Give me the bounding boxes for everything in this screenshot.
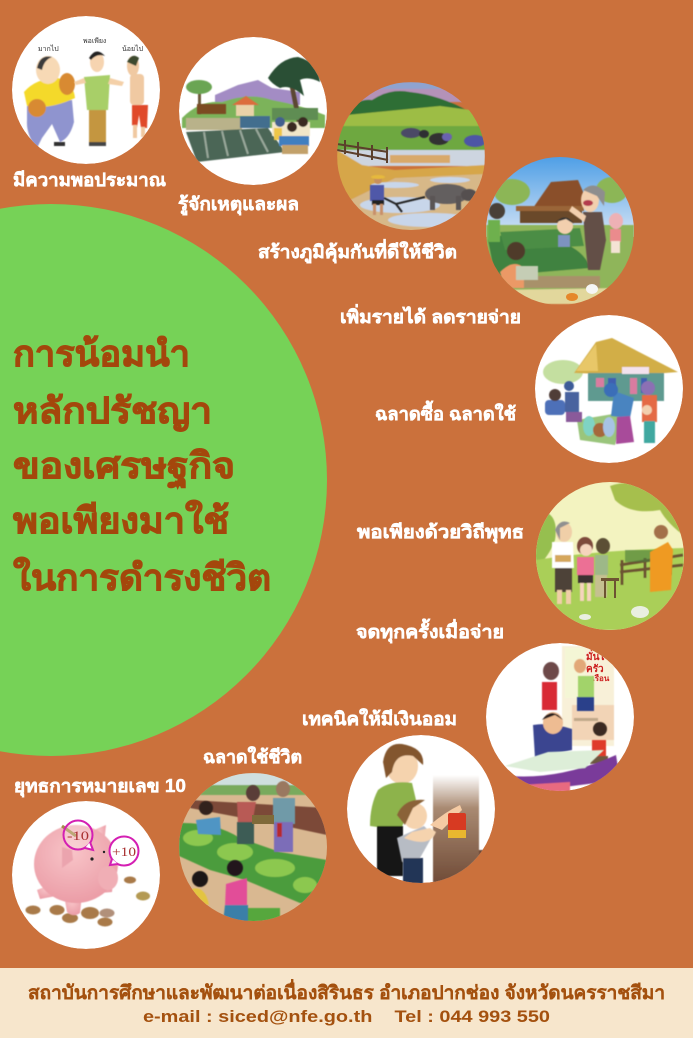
panel: account keeping illustration bbox=[486, 643, 634, 795]
buffalo bbox=[425, 184, 477, 210]
coin slot stick bbox=[62, 826, 76, 836]
child bbox=[590, 722, 608, 764]
panel: garden and house illustration bbox=[486, 157, 634, 304]
coins bbox=[26, 876, 150, 926]
labels in illustration: น้อยไป bbox=[122, 44, 144, 53]
bubble plus ten: +10 bbox=[112, 844, 136, 859]
title: ของเศรษฐกิจ bbox=[13, 445, 235, 489]
customers bbox=[545, 381, 657, 444]
elder bbox=[552, 522, 574, 604]
woman bbox=[237, 785, 260, 844]
jars bbox=[583, 416, 615, 437]
father bbox=[370, 744, 423, 876]
bubble plus ten bbox=[110, 836, 138, 866]
label: immunity: สร้างภูมิคุ้มกันที่ดีให้ชีวิต bbox=[258, 239, 457, 264]
boy bbox=[397, 800, 436, 886]
pig character bbox=[609, 213, 623, 253]
bubble minus ten: -10 bbox=[67, 828, 89, 843]
figure: middle man bbox=[74, 51, 124, 146]
house and sign bbox=[197, 96, 259, 116]
title: พอเพียงมาใช้ bbox=[13, 499, 229, 541]
child in yellow bbox=[192, 871, 209, 905]
child left bbox=[488, 203, 505, 242]
panel: almsgiving illustration bbox=[535, 482, 690, 630]
child in center bbox=[556, 217, 574, 247]
panel: shop illustration bbox=[535, 315, 683, 463]
footer institute name: สถาบันการศึกษาและพัฒนาต่อเนื่องสิรินธร อำเภอปากช่อง จังหวัดนครราชสีมา bbox=[28, 979, 665, 1004]
crouching boy bbox=[196, 801, 221, 835]
trees, house and garden bbox=[486, 177, 634, 304]
arm reaching to can bbox=[430, 805, 462, 830]
child back bbox=[500, 242, 538, 288]
household chart title bbox=[586, 649, 610, 683]
panel: vegetable garden illustration bbox=[179, 773, 327, 924]
girl in pink bbox=[577, 537, 594, 601]
father at table bbox=[533, 712, 572, 758]
man on stool bbox=[574, 659, 598, 721]
woman in red bbox=[542, 662, 559, 710]
fence bbox=[337, 140, 388, 163]
shop bbox=[543, 338, 678, 445]
label: smart shopping: ฉลาดซื้อ ฉลาดใช้ bbox=[375, 400, 516, 424]
man bbox=[273, 781, 295, 852]
labels in illustration: มากไป bbox=[38, 44, 59, 53]
pig bbox=[34, 825, 118, 915]
labels in illustration: พอเพียง bbox=[83, 37, 106, 45]
scenery bbox=[182, 80, 325, 162]
wall shade bbox=[433, 775, 497, 890]
panel: saving money illustration bbox=[347, 735, 497, 890]
title: ในการดำรงชีวิต bbox=[13, 556, 271, 598]
figure: thin man bbox=[127, 56, 148, 138]
schoolchildren bbox=[272, 108, 318, 154]
footer contact: e-mail : siced@nfe.go.th Tel : 044 993 550 bbox=[143, 1007, 550, 1026]
fields bbox=[179, 773, 327, 924]
table and rug bbox=[500, 750, 620, 795]
panel: rice field illustration bbox=[337, 82, 486, 232]
grandfather bbox=[569, 185, 606, 270]
label: saving techniques: เทคนิคให้มีเงินออม bbox=[302, 708, 457, 729]
palm trees bbox=[186, 57, 320, 128]
monk bbox=[650, 525, 673, 592]
money can bbox=[448, 813, 466, 838]
footer band bbox=[0, 968, 693, 1038]
label: income and expense: เพิ่มรายได้ ลดรายจ่าย bbox=[340, 304, 521, 327]
label: smart living: ฉลาดใช้ชีวิต bbox=[203, 746, 302, 767]
label: number ten strategy: ยุทธการหมายเลข 10 bbox=[14, 776, 186, 798]
labels in illustration bbox=[38, 37, 143, 51]
panel: moderation illustration bbox=[12, 16, 160, 164]
farmer and plough bbox=[370, 175, 425, 215]
child in pink bbox=[223, 860, 248, 922]
basket bbox=[252, 815, 274, 824]
panel: piggy bank illustration bbox=[12, 801, 160, 949]
label: cause and effect: รู้จักเหตุและผล bbox=[178, 194, 299, 216]
household chart title: มั่นใ bbox=[586, 649, 604, 663]
label: moderation: มีความพอประมาณ bbox=[13, 170, 166, 190]
bubble minus ten bbox=[64, 820, 93, 850]
stand bbox=[601, 578, 619, 598]
household chart title: ครัว bbox=[586, 663, 604, 675]
figure: fat man bbox=[24, 56, 75, 148]
title: การน้อมนำ bbox=[13, 333, 190, 374]
item labels bbox=[13, 170, 524, 798]
title: หลักปรัชญา bbox=[13, 390, 212, 432]
panel: field and schoolchildren illustration bbox=[179, 37, 327, 185]
flower bbox=[586, 284, 598, 294]
label: record spending: จดทุกครั้งเมื่อจ่าย bbox=[356, 618, 504, 644]
household chart title: เรือน bbox=[592, 673, 610, 683]
label: buddhist way: พอเพียงด้วยวิถีพุทธ bbox=[357, 522, 524, 544]
flowers bbox=[579, 606, 649, 620]
girl in green bbox=[595, 538, 610, 597]
wall bbox=[562, 646, 614, 746]
scenery bbox=[535, 483, 690, 630]
title bbox=[13, 333, 271, 598]
planters bbox=[401, 128, 486, 147]
green title circle bbox=[0, 204, 327, 756]
